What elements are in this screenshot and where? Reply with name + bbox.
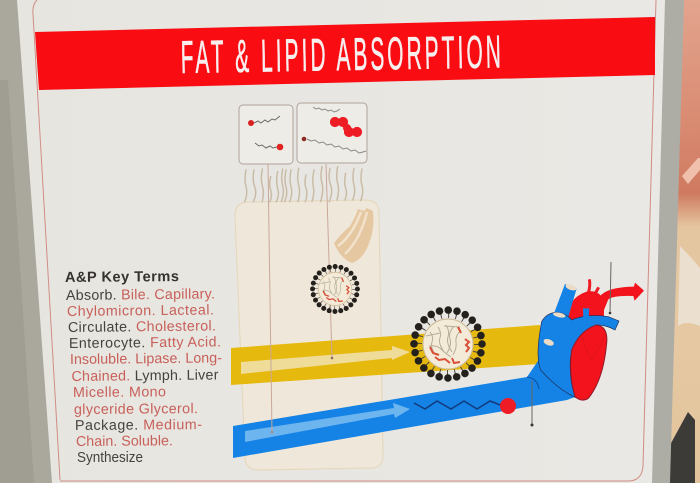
title: FAT & LIPID ABSORPTION bbox=[180, 26, 501, 83]
term line 2: Chylomicron. Lacteal. bbox=[67, 302, 214, 320]
red molecule 1 bbox=[248, 120, 254, 126]
glycerol head bbox=[500, 398, 516, 414]
superior vena cava bbox=[554, 284, 577, 317]
lymph band arrow bbox=[241, 346, 410, 374]
aorta body bbox=[566, 291, 604, 322]
leader dot: artery bbox=[609, 312, 611, 314]
term line 1: Absorb. Bile. Capillary. bbox=[66, 286, 215, 304]
leader dot: vein bbox=[530, 424, 534, 426]
leader dot bbox=[331, 357, 333, 359]
brown head bbox=[302, 137, 306, 141]
leader lines bbox=[268, 164, 332, 432]
golgi stacks bbox=[334, 208, 373, 263]
golgi shading bbox=[338, 212, 367, 254]
blue heart body bbox=[538, 312, 619, 397]
background: photo on the right bbox=[665, 0, 700, 483]
term line 6: Chained. Lymph. Liver bbox=[71, 367, 219, 385]
pulmonary stem bbox=[583, 308, 589, 318]
box: cholesterol and long chain bbox=[297, 103, 367, 163]
heart bbox=[538, 279, 644, 400]
background: grey binder edge bbox=[652, 0, 684, 483]
box frame bbox=[239, 105, 293, 164]
leader line: artery bbox=[610, 262, 611, 313]
heading: A&P Key Terms: A&P Key Terms bbox=[65, 269, 179, 286]
blood band: blue bbox=[233, 358, 575, 458]
blood band arrow bbox=[245, 403, 410, 442]
box: fatty acid and monoglyceride bbox=[239, 105, 293, 164]
panel: key terms bbox=[65, 269, 222, 466]
chain 2 bbox=[255, 143, 277, 148]
short chain bbox=[313, 107, 340, 112]
chain bbox=[414, 401, 508, 409]
background: left shade bbox=[0, 80, 34, 483]
box frame bbox=[297, 103, 367, 163]
background: desk surface left bbox=[0, 0, 52, 483]
large micelle bbox=[414, 310, 482, 378]
lymph band: yellow bbox=[231, 325, 540, 385]
photo: pink streak bbox=[682, 158, 700, 184]
red ventricle bbox=[571, 325, 607, 400]
inner opening bbox=[543, 338, 555, 347]
vessel opening bbox=[553, 311, 566, 319]
leader dot bbox=[271, 431, 273, 433]
term line 3: Circulate. Cholesterol. bbox=[68, 318, 216, 336]
aorta arrow bbox=[597, 283, 644, 310]
enterocyte cell bbox=[235, 200, 383, 470]
chain 1 bbox=[254, 116, 280, 123]
vein curve at heart bbox=[527, 377, 539, 389]
title banner bbox=[35, 17, 655, 90]
banner: red band bbox=[35, 17, 655, 90]
small micelle bbox=[313, 267, 357, 311]
golgi organelle bbox=[334, 208, 373, 263]
term line 11: Synthesize bbox=[77, 450, 143, 466]
ventricle shading bbox=[583, 335, 604, 359]
term line 9: Package. Medium- bbox=[75, 417, 202, 434]
term line 4: Enterocyte. Fatty Acid. bbox=[69, 334, 221, 352]
photo: dark lower corner bbox=[668, 412, 695, 483]
vena cava opening bbox=[565, 283, 577, 292]
term line 7: Micelle. Mono bbox=[73, 384, 166, 401]
fatty acid chain with red head bbox=[414, 398, 516, 414]
small red vessels bbox=[588, 279, 599, 294]
microvilli bbox=[245, 167, 363, 202]
term line 5: Insoluble. Lipase. Long- bbox=[70, 350, 222, 368]
photo: white fur bbox=[678, 246, 700, 326]
leader line: vein bbox=[531, 381, 533, 425]
term line 8: glyceride Glycerol. bbox=[74, 401, 198, 418]
red cholesterol rings bbox=[330, 117, 362, 137]
long chain bbox=[307, 139, 366, 153]
term line 10: Chain. Soluble. bbox=[76, 433, 173, 450]
red molecule 2 bbox=[277, 144, 283, 150]
